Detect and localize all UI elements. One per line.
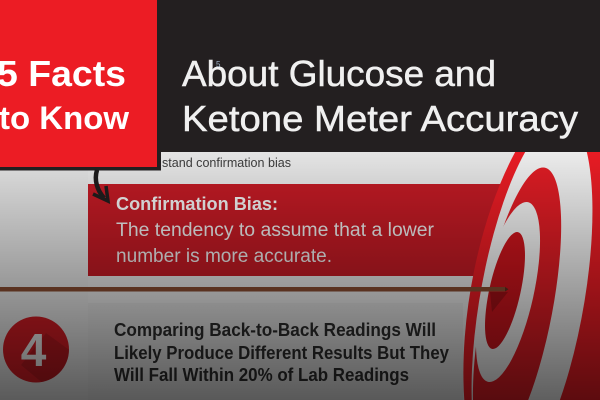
fact 4 text: Likely Produce Different Results But They bbox=[114, 343, 449, 363]
curved arrow bbox=[93, 170, 108, 201]
panel: fact 4 bbox=[3, 316, 449, 385]
stray small digit: 5 bbox=[216, 60, 221, 69]
fact 4 text: Comparing Back-to-Back Readings Will bbox=[114, 320, 436, 340]
title: Ketone Meter Accuracy bbox=[182, 98, 579, 139]
background panel bbox=[0, 150, 600, 400]
red badge: 5 Facts to Know: to Know bbox=[0, 100, 129, 136]
intro text fragment: stand confirmation bias bbox=[162, 156, 291, 170]
red badge: 5 Facts to Know: 5 Facts bbox=[0, 53, 126, 94]
panel: confirmation bias definition: The tendency to assume that a lower bbox=[116, 220, 435, 241]
fact 4 text: Will Fall Within 20% of Lab Readings bbox=[114, 365, 409, 385]
arrow: shaft into target bbox=[0, 287, 508, 312]
panel: confirmation bias definition: Confirmation Bias: bbox=[116, 194, 278, 214]
shading overlay bbox=[0, 150, 600, 400]
number badge 4: 4 bbox=[21, 324, 47, 376]
red badge: 5 Facts to Know bbox=[0, 0, 161, 170]
panel: confirmation bias definition: number is more accurate. bbox=[116, 246, 332, 267]
number badge 4 bbox=[3, 316, 72, 385]
fact 4 text bbox=[114, 320, 449, 385]
header bar bbox=[0, 0, 600, 152]
title bbox=[182, 53, 579, 139]
panel: confirmation bias definition bbox=[88, 184, 504, 276]
target icon bbox=[463, 152, 600, 400]
title: About Glucose and bbox=[182, 53, 496, 94]
